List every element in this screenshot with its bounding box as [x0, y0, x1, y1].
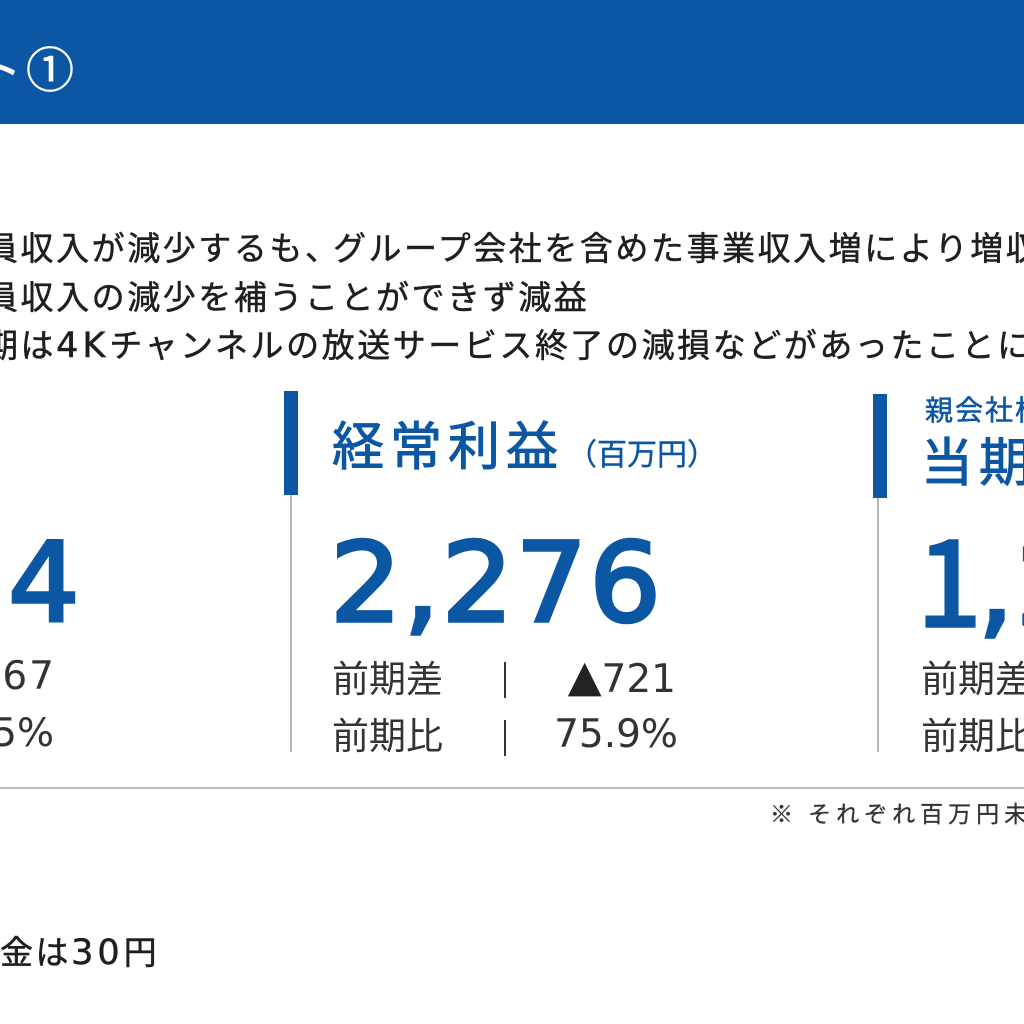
difference value: ▲721	[568, 651, 676, 702]
left metric difference: 67	[2, 654, 56, 699]
summary line 2: 員収入の減少を補うことができず減益	[0, 271, 589, 319]
accent bar	[873, 394, 887, 498]
panel: ordinary profit	[284, 391, 717, 760]
unit label: （百万円）	[567, 430, 717, 474]
metric value: 2,276	[330, 519, 663, 647]
divider line	[877, 498, 879, 752]
difference separator	[504, 662, 506, 698]
panel: net income	[873, 394, 1024, 753]
panel heading: 経常利益	[332, 405, 564, 480]
summary line 3: 期は4Kチャンネルの放送サービス終了の減損などがあったことに	[0, 319, 1024, 367]
metric value first digit: 1	[917, 492, 983, 660]
header band	[0, 0, 1024, 124]
ratio label: 前期比	[332, 706, 443, 760]
horizontal rule	[0, 787, 1024, 789]
left metric value: 4	[8, 519, 82, 647]
divider line	[290, 495, 292, 752]
accent bar	[284, 391, 298, 495]
ratio value: 75.9%	[554, 712, 678, 757]
dividend text: 金は30円	[0, 926, 159, 974]
panel: left metric remainder	[0, 519, 82, 756]
difference label: 前期差	[332, 649, 443, 703]
ratio separator	[504, 720, 506, 756]
summary text	[0, 222, 1024, 367]
